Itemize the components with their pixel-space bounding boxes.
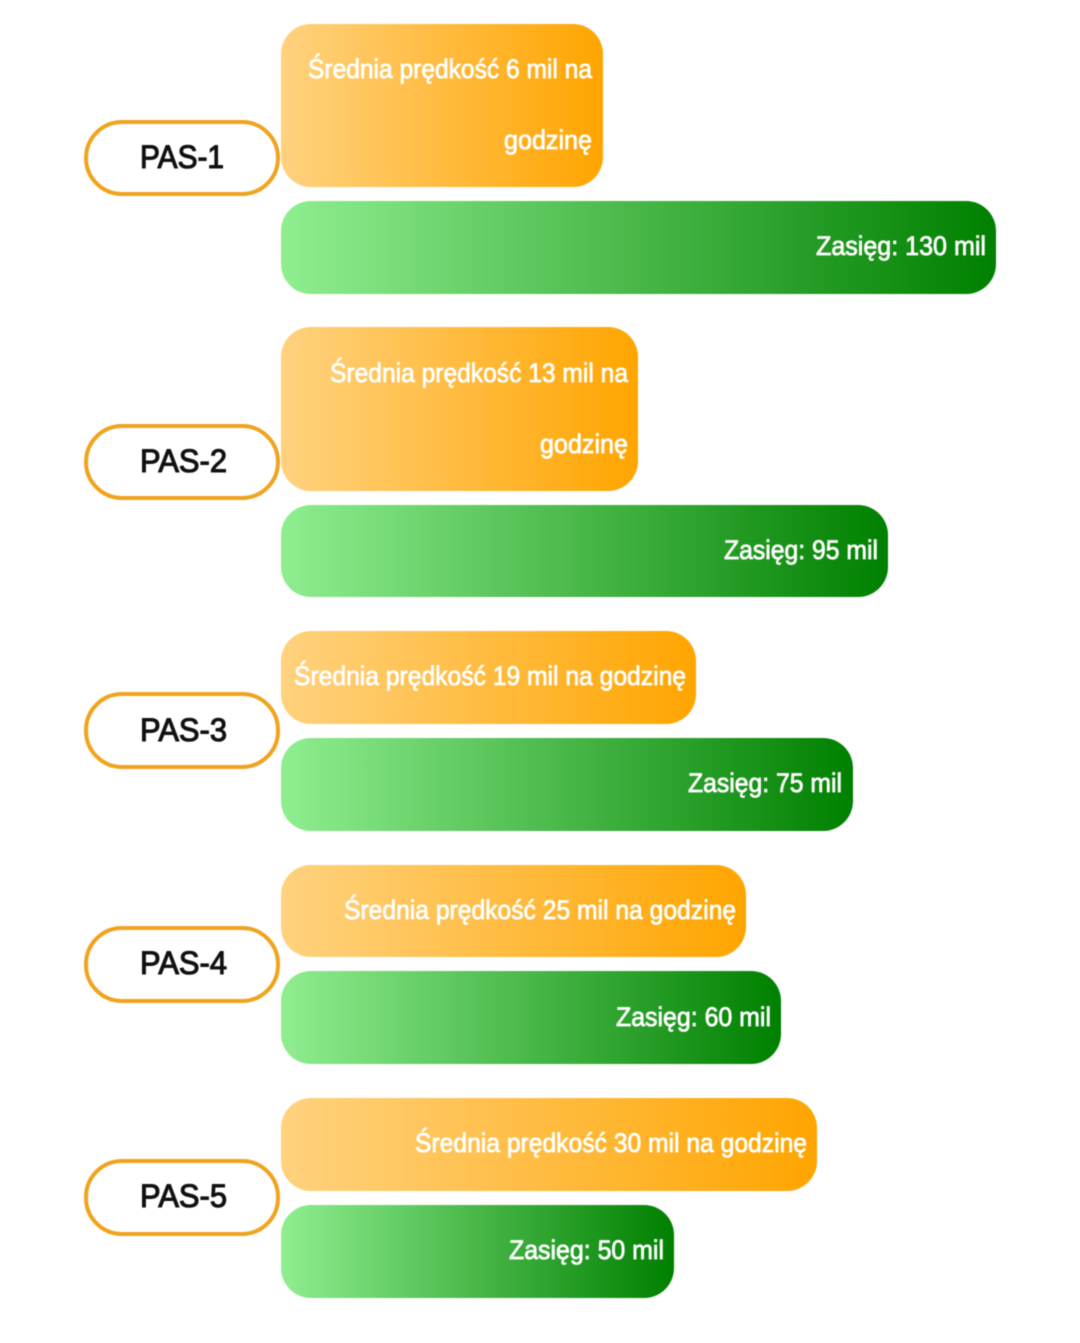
label pill: PAS-5 xyxy=(86,1161,278,1234)
range bar: PAS-3: Zasięg: 75 mil xyxy=(688,768,842,798)
label pill: PAS-4 xyxy=(86,928,278,1001)
speed bar: PAS-5 xyxy=(281,1098,817,1191)
speed bar: PAS-5: Średnia prędkość 30 mil na godzinę xyxy=(415,1126,807,1158)
speed bar: PAS-2: Średnia prędkość 13 mil na xyxy=(330,356,629,388)
label pill: PAS-3 xyxy=(86,694,278,767)
speed bar: PAS-1: godzinę xyxy=(504,125,592,155)
speed bar: PAS-4: Średnia prędkość 25 mil na godzinę xyxy=(344,893,736,925)
label pill: PAS-4: PAS-4 xyxy=(140,945,227,981)
range bar: PAS-4 xyxy=(281,971,781,1064)
range bar: PAS-1: Zasięg: 130 mil xyxy=(816,231,986,261)
range bar: PAS-1 xyxy=(281,201,996,294)
range bar: PAS-4: Zasięg: 60 mil xyxy=(616,1002,771,1032)
range bar: PAS-2: Zasięg: 95 mil xyxy=(724,535,878,565)
speed bar: PAS-1 xyxy=(281,24,603,187)
label pill: PAS-1: PAS-1 xyxy=(140,139,224,175)
range bar: PAS-2 xyxy=(281,505,888,597)
label pill: PAS-2 xyxy=(86,426,278,498)
speed bar: PAS-3 xyxy=(281,631,696,724)
label pill: PAS-3: PAS-3 xyxy=(140,712,227,748)
speed bar: PAS-3: Średnia prędkość 19 mil na godzinę xyxy=(294,659,686,691)
range bar: PAS-5: Zasięg: 50 mil xyxy=(509,1235,664,1265)
panel: PAS-2 xyxy=(86,327,888,597)
panel: PAS-4 xyxy=(86,865,781,1064)
range bar: PAS-5 xyxy=(281,1205,674,1298)
range bar: PAS-3 xyxy=(281,738,853,831)
label pill: PAS-2: PAS-2 xyxy=(140,443,227,479)
speed bar: PAS-2: godzinę xyxy=(540,429,628,459)
panel: PAS-1 xyxy=(86,24,996,294)
panel: PAS-5 xyxy=(86,1098,817,1298)
label pill: PAS-1 xyxy=(86,122,278,194)
speed bar: PAS-2 xyxy=(281,327,638,491)
speed bar: PAS-1: Średnia prędkość 6 mil na xyxy=(308,52,593,84)
panel: PAS-3 xyxy=(86,631,853,831)
speed bar: PAS-4 xyxy=(281,865,746,957)
label pill: PAS-5: PAS-5 xyxy=(140,1178,227,1214)
